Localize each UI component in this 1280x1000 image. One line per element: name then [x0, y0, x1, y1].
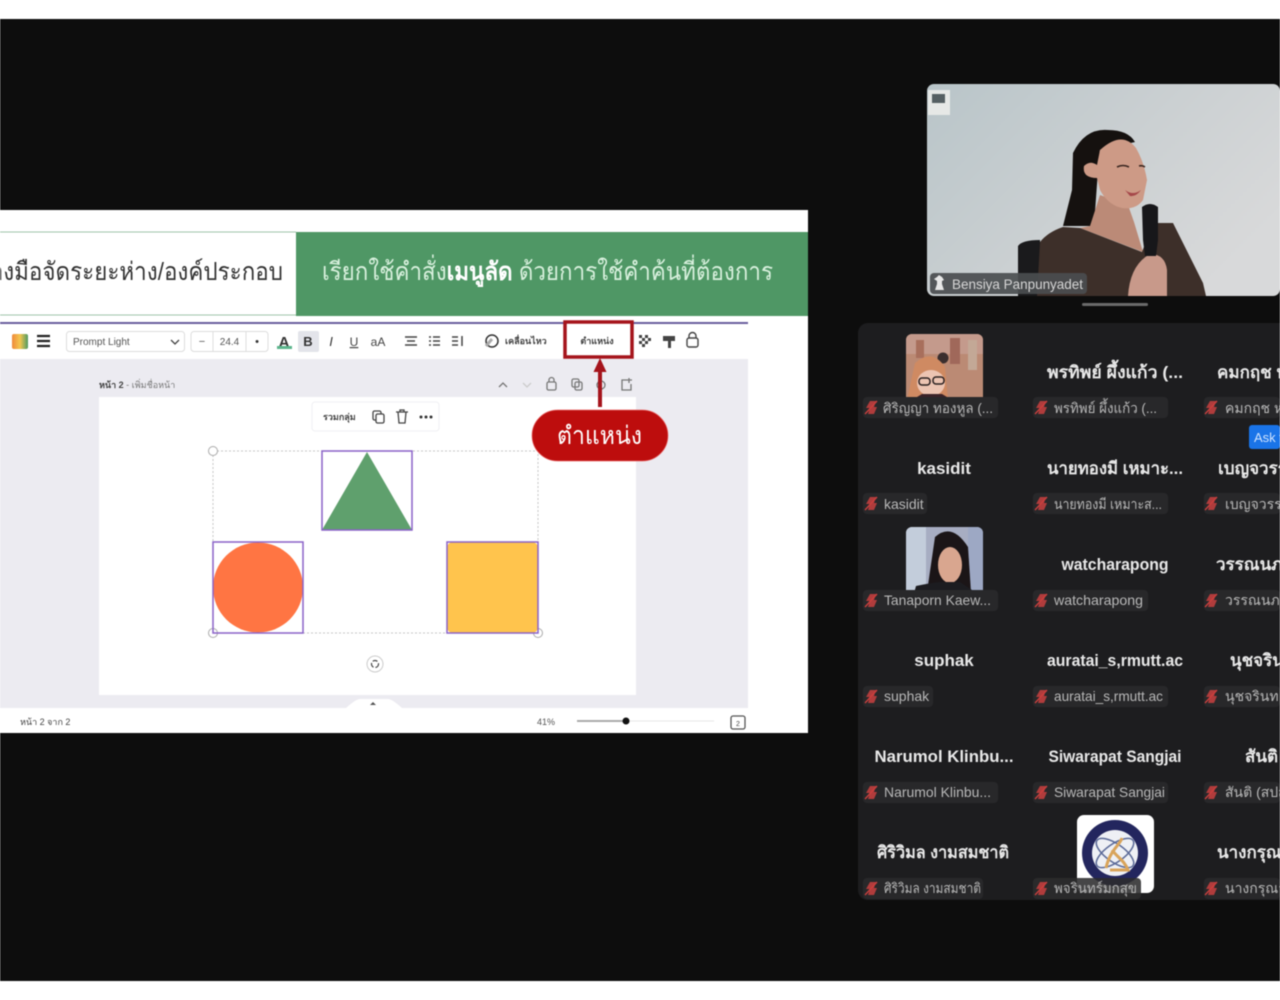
wall thermostat	[928, 90, 950, 115]
participant tile: row 4 column 1	[863, 651, 974, 707]
highlighted position button	[565, 322, 632, 357]
participant tile: row 1 column 3	[1204, 363, 1280, 418]
icon: colour swatch	[12, 334, 28, 349]
participant tile: row 4 column 2	[1033, 651, 1183, 707]
participant tile: row 5 column 2: Siwarapat Sangjai	[1048, 747, 1182, 766]
smile	[1125, 190, 1141, 196]
heading: green banner	[296, 232, 808, 316]
participant tile: row 4 column 1: suphak	[884, 688, 930, 704]
shape: green triangle	[322, 451, 412, 530]
font selector	[66, 332, 184, 352]
participant tile: row 6 column 2	[1033, 815, 1154, 899]
icon: institution logo	[1077, 815, 1154, 893]
participant tile: row 5 column 3	[1204, 747, 1280, 803]
toolbar right icons	[639, 332, 698, 348]
dress	[1037, 223, 1206, 296]
text format icons: aA	[371, 335, 385, 349]
participant tile: row 5 column 2: Siwarapat Sangjai	[1054, 784, 1165, 800]
editor canvas area	[0, 359, 748, 708]
panel: participants gallery	[858, 323, 1280, 900]
font size control: −	[199, 336, 205, 348]
paragraph icons	[405, 336, 462, 346]
name tag: Bensiya Panpunyadet	[952, 276, 1083, 292]
participant tile: row 3 column 1	[863, 527, 998, 611]
participant tile: row 4 column 3	[1204, 651, 1280, 707]
participant tile: row 2 column 1: kasidit	[917, 459, 971, 478]
text format icons: B	[303, 334, 313, 349]
text format icons: I	[329, 334, 333, 349]
microphone	[1142, 204, 1158, 256]
selection outline	[208, 446, 542, 638]
status bar	[0, 708, 808, 733]
button: ask	[1249, 425, 1280, 449]
font size control	[191, 332, 268, 352]
font size control: •	[255, 336, 259, 348]
participant tile: row 2 column 2: นายทองมี เหมาะส...	[1054, 496, 1162, 512]
callout: position	[532, 410, 668, 461]
participant tile: row 4 column 2: auratai_s,rmutt.ac	[1047, 651, 1183, 670]
participant tile: row 5 column 1: Narumol Klinbu...	[884, 784, 991, 800]
text format icons	[277, 331, 385, 352]
participant tile: row 2 column 3	[1204, 459, 1280, 514]
participant tile: row 5 column 3: สันติ	[1245, 747, 1278, 766]
participant tile: row 3 column 2	[1033, 555, 1168, 611]
animation button	[486, 334, 547, 347]
participant tile: row 3 column 1: Tanaporn Kaew...	[884, 592, 991, 608]
arrow: callout to position button	[594, 358, 606, 407]
eyes	[1117, 166, 1145, 167]
participant tile: row 1 column 2	[1033, 359, 1183, 418]
status bar: หน้า 2 จาก 2	[20, 717, 70, 727]
editor toolbar	[0, 322, 748, 359]
scroll handle	[1082, 303, 1148, 306]
participant tile: row 1 column 1: ศิริญญา ทองหูล (...	[883, 400, 993, 417]
heading: green banner: เรียกใช้คำสั่งเมนูลัด ด้วยการใช้คำค้นที่ต้องการ	[322, 254, 773, 288]
participant tile: row 4 column 1: suphak	[914, 651, 974, 670]
participant tile: row 6 column 3	[1204, 843, 1280, 899]
page label: หน้า 2 - เพิ่มชื่อหน้า	[99, 378, 175, 390]
participant tile: row 2 column 2	[1033, 458, 1183, 514]
shape: yellow square	[447, 542, 538, 633]
participant tile: row 1 column 2: พรทิพย์ ผึ้งแก้ว (...	[1054, 398, 1157, 416]
font selector: Prompt Light	[73, 337, 130, 348]
participant tile: row 5 column 1	[863, 747, 1014, 803]
participant tile: row 3 column 2: watcharapong	[1061, 555, 1168, 574]
face	[1084, 139, 1147, 208]
callout: position: ตำแหน่ง	[557, 422, 642, 450]
panel: shared slide	[0, 210, 808, 733]
text format icons: U	[350, 335, 358, 349]
participant tile: row 1 column 1	[863, 334, 998, 418]
chair	[1018, 240, 1040, 296]
participant tile: row 5 column 1: Narumol Klinbu...	[874, 747, 1014, 766]
participant tile: row 6 column 2: พจรินทร์มกสุข	[1054, 880, 1137, 897]
participant tile: row 6 column 1: ศิริวิมล งามสมชาติ	[877, 843, 1009, 862]
neck	[1080, 195, 1143, 252]
icon: line weight	[37, 336, 50, 346]
status bar: 41%	[537, 717, 555, 727]
floating selection toolbar: รวมกลุ่ม	[323, 412, 356, 423]
participant tile: row 2 column 1: kasidit	[884, 496, 924, 512]
participant tile: row 3 column 3	[1204, 555, 1280, 611]
hand	[1128, 254, 1167, 296]
participant tile: row 1 column 2: พรทิพย์ ผึ้งแก้ว (...	[1047, 359, 1183, 382]
participant tile: row 5 column 2	[1033, 747, 1182, 803]
status bar: 2	[736, 721, 740, 728]
animation button: เคลื่อนไหว	[505, 334, 547, 346]
shape: orange circle	[213, 542, 303, 633]
floating selection toolbar	[312, 402, 439, 431]
participant tile: row 2 column 2: นายทองมี เหมาะ...	[1047, 458, 1183, 478]
participant tile: row 3 column 2: watcharapong	[1053, 592, 1143, 608]
name tag	[930, 273, 1087, 294]
icon: rotate handle	[367, 656, 383, 672]
panel: speaker video	[927, 84, 1280, 296]
hair	[1063, 130, 1135, 226]
page action icons	[499, 378, 632, 390]
highlighted position button: ตำแหน่ง	[580, 336, 614, 346]
text format icons: A	[279, 334, 290, 351]
participant tile: row 2 column 1	[863, 459, 971, 514]
heading: spacing tools	[0, 231, 296, 316]
participant tile: row 6 column 1: ศิริวิมล งามสมชาติ	[884, 880, 981, 896]
participant tile: row 4 column 2: auratai_s,rmutt.ac	[1054, 688, 1163, 704]
participant tile: row 4 column 3: นุชจรินท	[1225, 688, 1279, 705]
participant tile: row 6 column 1	[863, 843, 1009, 899]
font size control: 24.4	[220, 337, 240, 348]
